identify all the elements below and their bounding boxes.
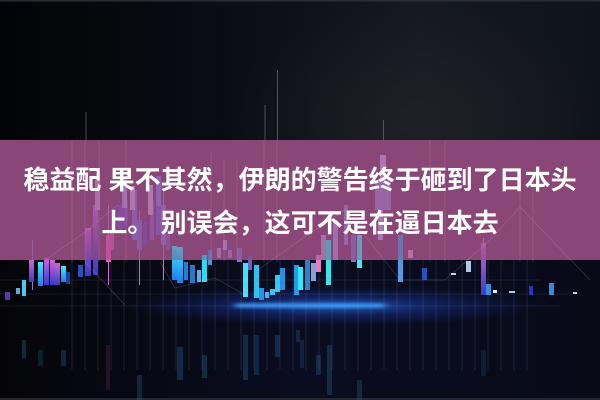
pink banner behind title bbox=[0, 140, 600, 260]
lower dark backdrop with blue glow bbox=[0, 260, 600, 400]
candlesticks seen through banner bbox=[32, 155, 486, 260]
title bbox=[23, 165, 577, 238]
title: 上。 别误会，这可不是在逼日本去 bbox=[101, 208, 499, 238]
reflected candlesticks bbox=[22, 330, 486, 400]
title: 稳益配 果不其然，伊朗的警告终于砸到了日本头 bbox=[23, 165, 577, 195]
banner vertical streaks and trend lines bbox=[48, 140, 590, 305]
chart grid bbox=[0, 260, 580, 370]
upper dark backdrop bbox=[0, 0, 600, 260]
candlesticks in lower area bbox=[5, 190, 577, 300]
thin wicks above band bbox=[86, 70, 384, 142]
